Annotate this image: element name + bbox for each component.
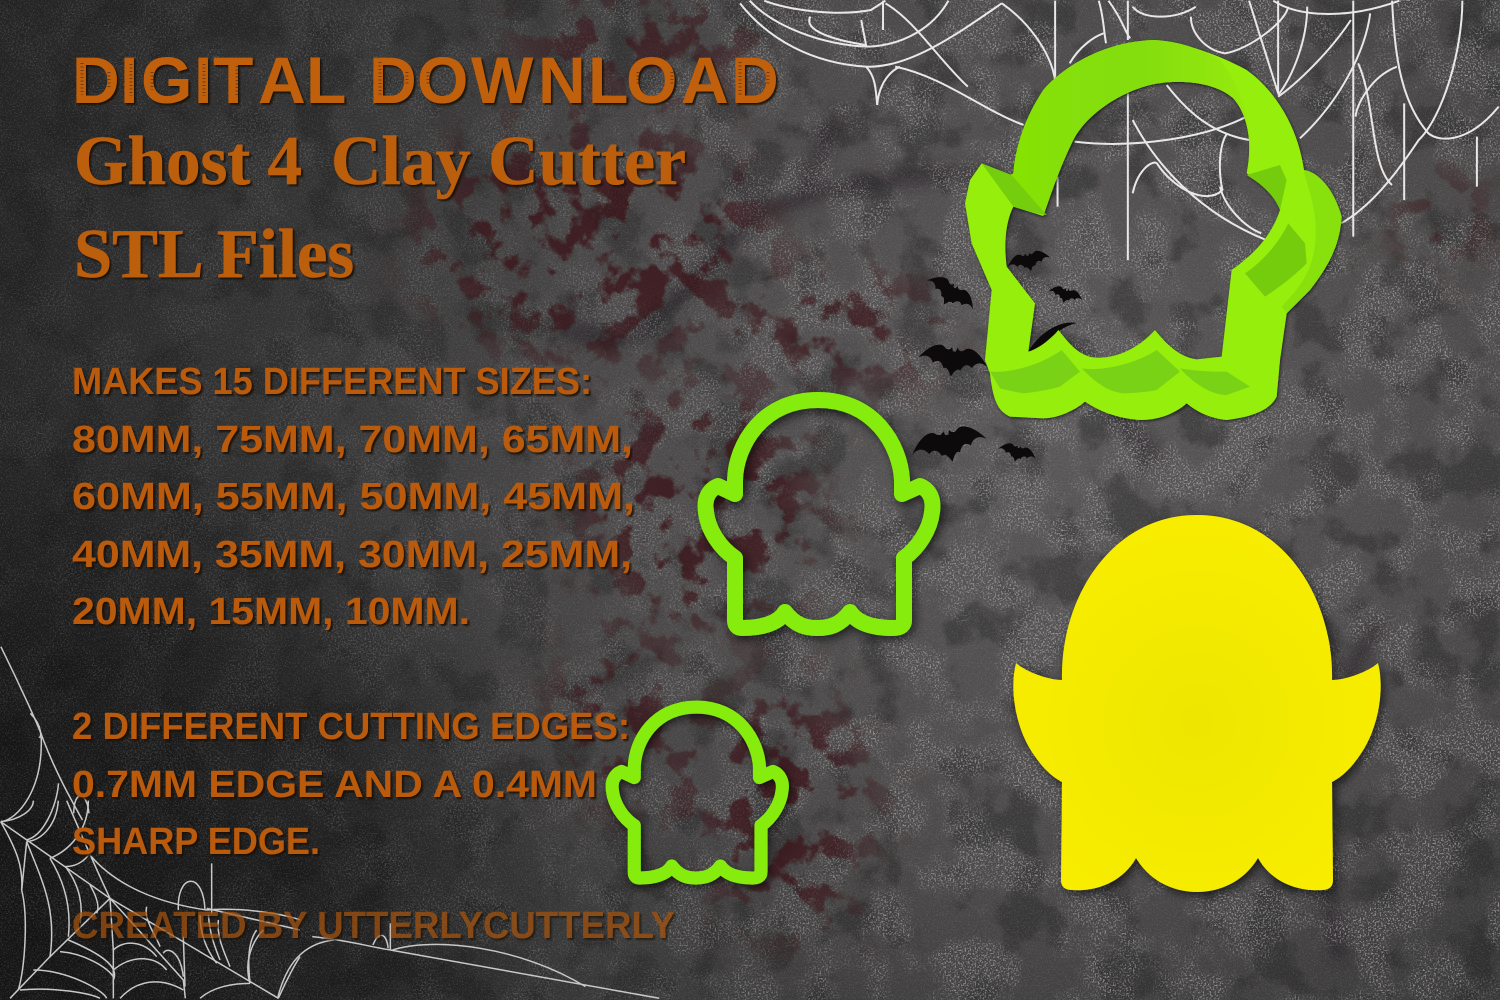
left wing face bbox=[982, 163, 1047, 215]
right flange bbox=[1282, 170, 1342, 313]
text block: sizes: 80MM, 75MM, 70MM, 65MM, bbox=[72, 419, 633, 461]
heading: ghost 4 clay cutter: Ghost 4 bbox=[74, 123, 302, 200]
top band bbox=[1012, 40, 1251, 216]
cutter body bbox=[965, 40, 1342, 420]
icon: large 3D green cutter bbox=[965, 40, 1342, 420]
icon: small green outline cutter bbox=[612, 707, 782, 878]
text block: sizes: 40MM, 35MM, 30MM, 25MM, bbox=[72, 534, 632, 576]
spider web: top right bbox=[740, 1, 1499, 260]
text block: sizes: 20MM, 15MM, 10MM. bbox=[72, 591, 470, 633]
bottom inner walls bbox=[990, 350, 1080, 393]
credit text: CREATED BY UTTERLYCUTTERLY bbox=[72, 905, 675, 947]
text block: sizes bbox=[72, 361, 635, 633]
text block: cutting edges: SHARP EDGE. bbox=[72, 821, 320, 863]
icon: medium green outline cutter bbox=[706, 400, 932, 628]
text block: cutting edges bbox=[72, 706, 630, 863]
spider web: bottom left bbox=[1, 647, 659, 998]
text block: cutting edges: 0.7MM EDGE AND A 0.4MM bbox=[72, 764, 597, 806]
heading: stl files: STL Files bbox=[74, 216, 354, 293]
heading: ghost 4 clay cutter bbox=[74, 123, 686, 200]
icon: solid yellow ghost stamp bbox=[1013, 515, 1381, 892]
right inner faces bbox=[1247, 165, 1287, 210]
title: digital download: DIGITALDOWNLOAD bbox=[72, 43, 779, 117]
text block: cutting edges: 2 DIFFERENT CUTTING EDGES: bbox=[72, 706, 630, 748]
text block: sizes: 60MM, 55MM, 50MM, 45MM, bbox=[72, 476, 635, 518]
icon: bats group bbox=[909, 248, 1084, 470]
heading: ghost 4 clay cutter: Clay Cutter bbox=[331, 123, 686, 200]
text block: sizes: MAKES 15 DIFFERENT SIZES: bbox=[72, 361, 592, 403]
